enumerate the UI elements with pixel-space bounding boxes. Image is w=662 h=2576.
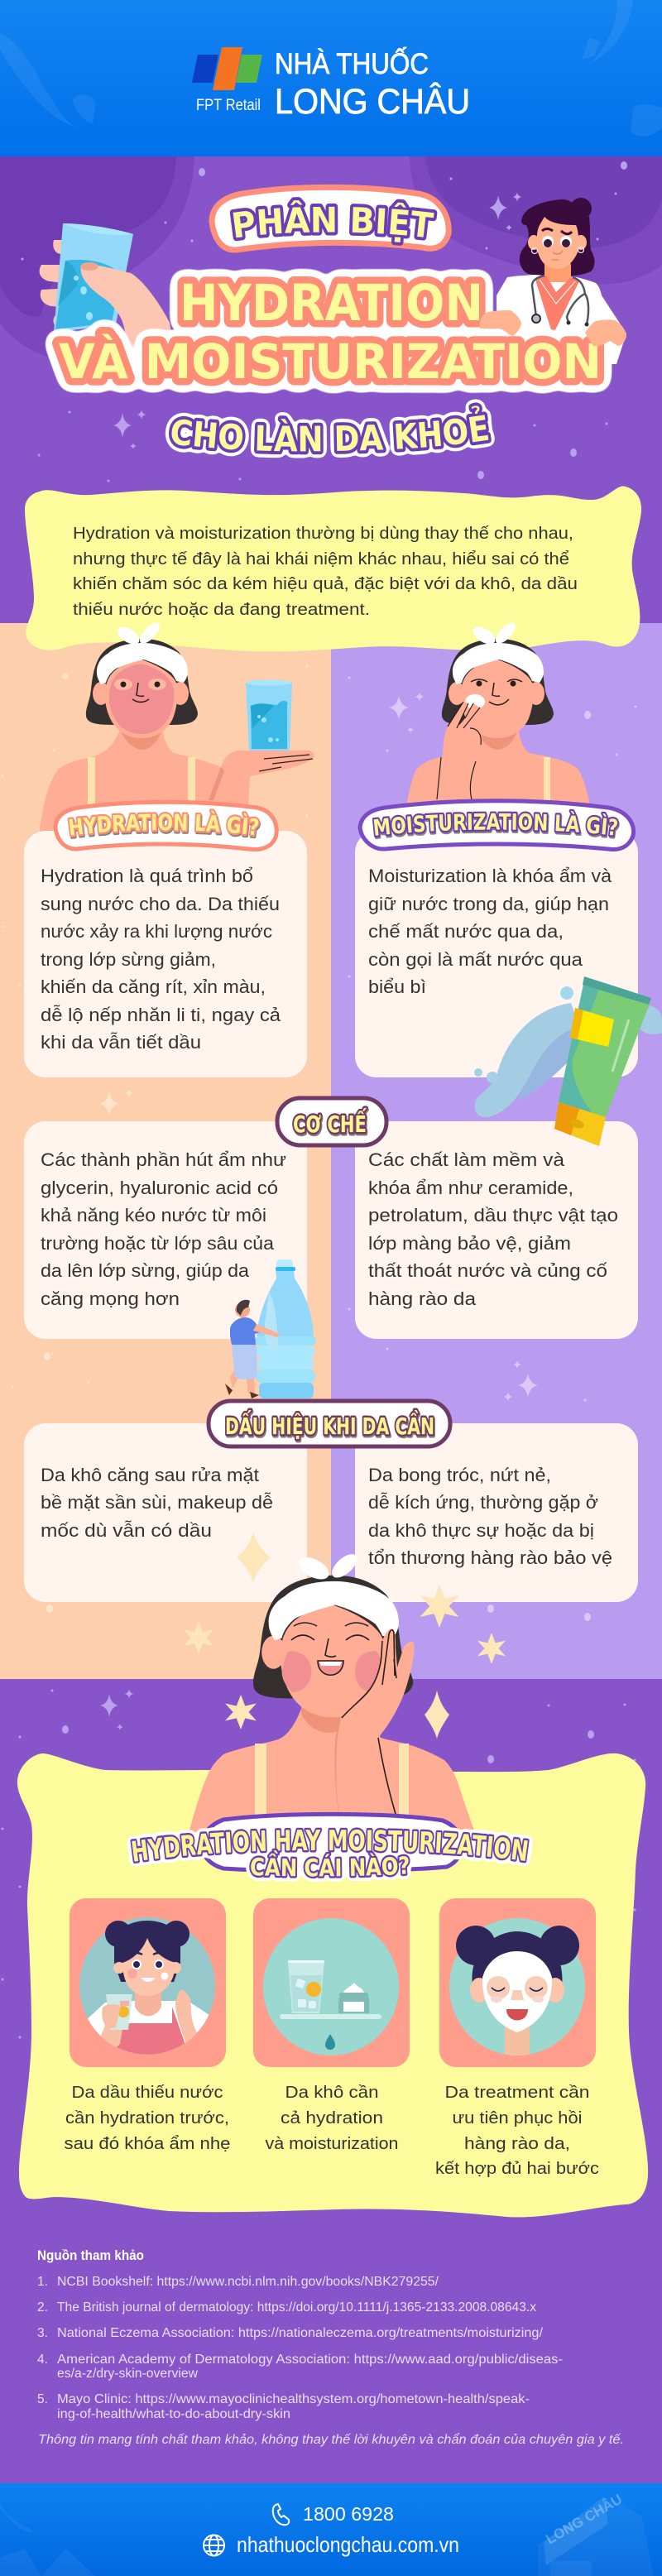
references xyxy=(37,2248,624,2447)
text: hydration mechanism: da lên lớp sừng, giúp da xyxy=(41,1260,250,1281)
references: 4. xyxy=(37,2353,48,2367)
text: moisturization mechanism: hàng rào da xyxy=(368,1288,477,1309)
pill: Dấu hiệu khi da cần xyxy=(209,1401,450,1446)
pill: Hydration là gì? xyxy=(53,799,279,851)
panel decoration sparkles xyxy=(2,665,637,1621)
pill: Moisturization là gì? xyxy=(357,799,636,851)
references: The British journal of dermatology: https://doi.org/10.1111/j.1365-2133.2008.08643.x xyxy=(57,2300,536,2315)
icon: person next to water bottle xyxy=(225,1259,316,1398)
pill: Dấu hiệu khi da cần: DẤU HIỆU KHI DA CẦN xyxy=(225,1408,434,1440)
text: hydration definition: trong lớp sừng giảm, xyxy=(41,949,216,970)
text: hydration definition: khiến da căng rít, xỉn màu, xyxy=(41,976,266,997)
card: moisturization mechanism xyxy=(355,1121,638,1339)
pill: Hydration hay moisturization cần cái nào?: CẦN CÁI NÀO? xyxy=(246,1849,412,1882)
text: moisturization definition: còn gọi là mất nước qua xyxy=(368,949,583,970)
intro text: Hydration và moisturization thường bị dùng thay thế cho nhau, xyxy=(73,525,573,543)
text: moisturization signs xyxy=(368,1465,612,1568)
intro text: khiến chăm sóc da kém hiệu quả, đặc biệt với da khô, da dầu xyxy=(73,575,578,593)
phone number: 1800 6928 xyxy=(303,2503,394,2525)
captions: three skin types: cần hydration trước, xyxy=(65,2109,229,2127)
icon: cream tube with water splash xyxy=(474,976,662,1146)
logo: Nhà Thuốc Long Châu xyxy=(275,47,470,122)
panel: moisturization column background xyxy=(331,623,662,1683)
header band xyxy=(0,0,662,156)
background sparkles: title area xyxy=(22,161,627,482)
card: dry skin xyxy=(253,1898,410,2067)
text: moisturization definition: chế mất nước qua da, xyxy=(368,921,564,942)
text: moisturization definition: Moisturization là khóa ẩm và xyxy=(368,866,612,886)
logo: FPT Retail: FPT Retail xyxy=(196,97,261,114)
captions: three skin types: Da khô cần xyxy=(285,2084,379,2102)
captions: three skin types: và moisturization xyxy=(265,2135,399,2153)
decorative golden stars xyxy=(184,1532,506,1739)
text: moisturization definition: giữ nước trong da, giúp hạn xyxy=(368,894,609,914)
card: hydration mechanism xyxy=(24,1121,307,1339)
purple background waves xyxy=(0,156,662,359)
title: Hydration: HYDRATION xyxy=(180,274,483,333)
text: hydration mechanism: glycerin, hyaluronic acid có xyxy=(41,1178,278,1198)
text: hydration signs: Da khô căng sau rửa mặt xyxy=(41,1465,259,1485)
references: 1. xyxy=(37,2275,48,2289)
icon: phone xyxy=(273,2504,289,2525)
pill: Hydration hay moisturization cần cái nào?: HYDRATION HAY MOISTURIZATION xyxy=(127,1827,533,1867)
references: ing-of-health/what-to-do-about-dry-skin xyxy=(57,2407,290,2421)
references: American Academy of Dermatology Association: https://www.aad.org/public/diseas- xyxy=(57,2353,563,2367)
pill: Cơ chế xyxy=(277,1098,386,1145)
references: Thông tin mang tính chất tham khảo, không thay thế lời khuyên và chẩn đoán của chuyên gia y tế. xyxy=(38,2433,624,2447)
references: 5. xyxy=(37,2392,48,2406)
pill: Hydration hay moisturization cần cái nào? xyxy=(127,1812,533,1882)
text: moisturization signs: dễ kích ứng, thường gặp ở xyxy=(368,1492,598,1513)
title badge: Phân biệt: PHÂN BIỆT xyxy=(230,197,437,246)
footer band xyxy=(0,2483,662,2576)
text: moisturization definition: biểu bì xyxy=(368,976,426,997)
captions: three skin types: hàng rào da, xyxy=(464,2135,570,2153)
intro text: thiếu nước hoặc da đang treatment. xyxy=(73,601,370,619)
pill: Cơ chế: CƠ CHẾ xyxy=(293,1107,367,1138)
references: National Eczema Association: https://nationaleczema.org/treatments/moisturizing/ xyxy=(57,2326,544,2340)
text: moisturization mechanism: petrolatum, dầu thực vật tạo xyxy=(368,1205,618,1226)
card: hydration definition xyxy=(24,831,307,1077)
references: 2. xyxy=(37,2300,48,2315)
doctor hands xyxy=(480,310,626,347)
icon: hand holding glass xyxy=(40,223,174,348)
text: hydration mechanism: căng mọng hơn xyxy=(41,1288,180,1309)
logo: FPT Retail xyxy=(192,47,262,114)
text: hydration mechanism: Các thành phần hút ẩm như xyxy=(41,1149,286,1170)
illustration: woman applying cotton pad xyxy=(401,620,594,836)
text: moisturization mechanism: lớp màng bảo vệ, giảm xyxy=(368,1233,571,1254)
text: hydration signs: bề mặt sần sùi, makeup dễ xyxy=(41,1492,273,1513)
bottom section sparkles xyxy=(2,1690,636,2039)
intro text xyxy=(73,525,578,619)
captions: three skin types: cả hydration xyxy=(281,2109,383,2127)
card: moisturization signs xyxy=(355,1423,638,1602)
text: hydration definition xyxy=(41,866,281,1053)
card: treated skin xyxy=(439,1898,596,2067)
pill: Hydration là gì?: HYDRATION LÀ GÌ? xyxy=(68,808,261,839)
captions: three skin types xyxy=(65,2084,599,2178)
panel: bottom yellow blob xyxy=(17,1753,648,2217)
website: nhathuoclongchau.com.vn xyxy=(237,2532,459,2557)
captions: three skin types: kết hợp đủ hai bước xyxy=(435,2160,599,2178)
title: cho làn da khoẻ: CHO LÀN DA KHOẺ xyxy=(166,399,495,458)
text: moisturization signs: tổn thương hàng rào bảo vệ xyxy=(368,1547,612,1568)
captions: three skin types: sau đó khóa ẩm nhẹ xyxy=(65,2135,230,2153)
icon: doctor xyxy=(496,198,626,364)
bottom purple section xyxy=(0,1679,662,2483)
text: hydration mechanism xyxy=(41,1149,286,1309)
text: hydration definition: nước xảy ra khi lượng nước xyxy=(41,921,272,942)
illustration: smiling woman touching cheek xyxy=(189,1550,475,1833)
text: hydration definition: dễ lộ nếp nhăn li ti, ngay cả xyxy=(41,1005,281,1025)
text: hydration definition: sung nước cho da. Da thiếu xyxy=(41,894,280,914)
logo: Nhà Thuốc Long Châu: NHÀ THUỐC xyxy=(275,47,429,80)
intro text: nhưng thực tế đây là hai khái niệm khác nhau, hiểu sai có thể xyxy=(73,550,569,568)
text: hydration mechanism: trường hoặc từ lớp sâu của xyxy=(41,1233,275,1254)
text: hydration mechanism: khả năng kéo nước từ môi xyxy=(41,1205,266,1226)
text: hydration definition: khi da vẫn tiết dầu xyxy=(41,1032,201,1053)
title badge: Phân biệt xyxy=(209,184,452,253)
captions: three skin types: ưu tiên phục hồi xyxy=(452,2109,583,2127)
icon: globe xyxy=(204,2535,224,2555)
panel: hydration column background xyxy=(0,623,331,1683)
footer band: LONG CHÂU xyxy=(543,2492,625,2547)
references: Nguồn tham khảo xyxy=(37,2248,144,2263)
text: moisturization mechanism: khóa ẩm như ceramide, xyxy=(368,1178,573,1198)
card: hydration signs xyxy=(24,1423,307,1602)
pill: Moisturization là gì?: MOISTURIZATION LÀ GÌ? xyxy=(372,809,620,839)
references: es/a-z/dry-skin-overview xyxy=(57,2367,199,2381)
card: oily dehydrated skin xyxy=(70,1898,226,2067)
card: moisturization definition xyxy=(355,831,638,1077)
text: moisturization signs: Da bong tróc, nứt nẻ, xyxy=(368,1465,551,1485)
text: moisturization mechanism xyxy=(368,1149,618,1309)
text: hydration signs: mốc dù vẫn có dầu xyxy=(41,1520,212,1541)
logo: Nhà Thuốc Long Châu: LONG CHÂU xyxy=(275,82,470,122)
captions: three skin types: Da dầu thiếu nước xyxy=(71,2084,223,2102)
panel: intro yellow blob xyxy=(25,486,641,651)
text: moisturization signs: da khô thực sự hoặc da bị xyxy=(368,1520,594,1541)
captions: three skin types: Da treatment cần xyxy=(445,2084,589,2102)
text: hydration definition: Hydration là quá trình bổ xyxy=(41,866,253,886)
references: Mayo Clinic: https://www.mayoclinichealthsystem.org/hometown-health/speak- xyxy=(57,2392,530,2406)
text: moisturization mechanism: Các chất làm mềm và xyxy=(368,1149,565,1170)
text: moisturization definition xyxy=(368,866,612,997)
text: hydration signs xyxy=(41,1465,273,1541)
references: 3. xyxy=(37,2326,48,2340)
references: NCBI Bookshelf: https://www.ncbi.nlm.nih.gov/books/NBK279255/ xyxy=(57,2275,439,2289)
title: và Moisturization: VÀ MOISTURIZATION xyxy=(59,333,602,390)
text: moisturization mechanism: thất thoát nước và củng cố xyxy=(368,1260,607,1281)
illustration: woman with clay mask holding water xyxy=(39,620,314,836)
